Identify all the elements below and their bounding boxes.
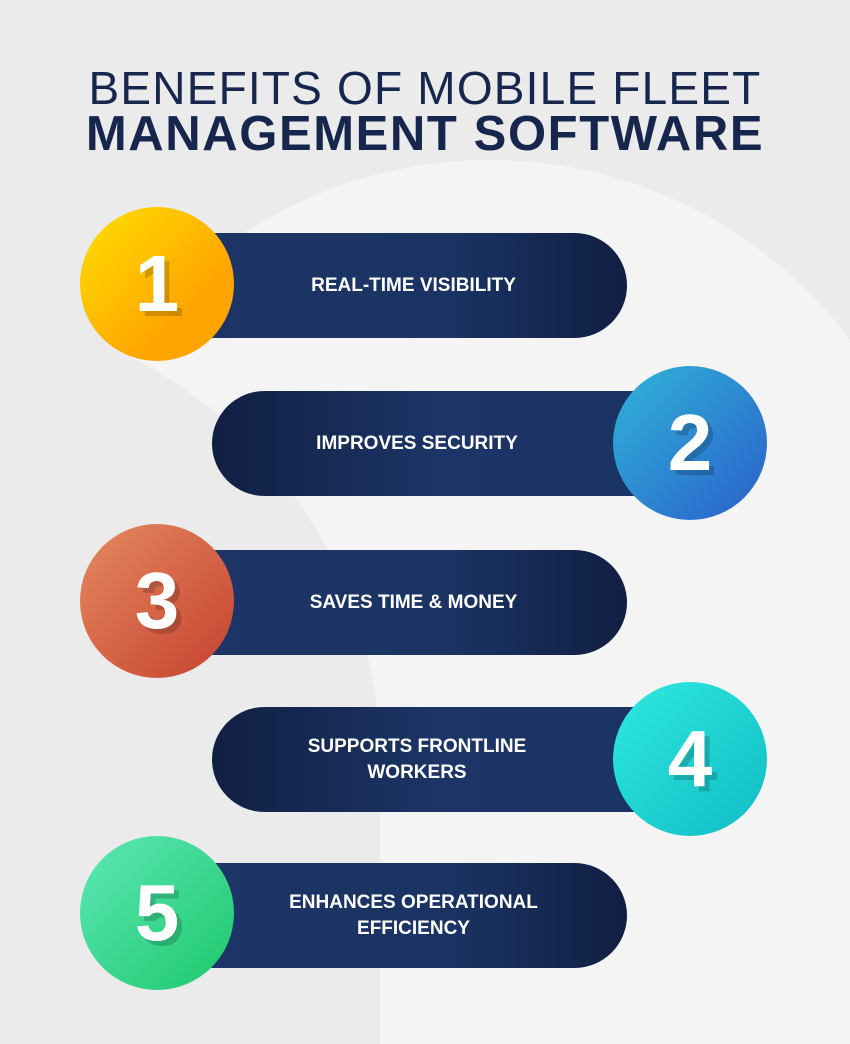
circle 3: 3 — [135, 556, 179, 645]
title: BENEFITS OF MOBILE FLEET — [89, 62, 761, 114]
circle 5 — [80, 836, 234, 990]
title: MANAGEMENT SOFTWARE — [86, 107, 764, 161]
items — [80, 207, 767, 990]
pill: saves time & money: SAVES TIME & MONEY — [310, 592, 517, 612]
pill: improves security: IMPROVES SECURITY — [316, 432, 518, 454]
circle 2: 2 — [668, 398, 712, 487]
circle 4 — [613, 682, 767, 836]
pill: improves security — [212, 391, 662, 496]
pill: supports frontline workers: SUPPORTS FRONTLINE — [308, 736, 526, 756]
circle 2 — [613, 366, 767, 520]
circle 3 — [80, 524, 234, 678]
pill: supports frontline workers — [212, 707, 662, 812]
circle 4: 4 — [668, 714, 712, 803]
pill: supports frontline workers: WORKERS — [367, 762, 467, 782]
pill: enhances operational efficiency: ENHANCES OPERATIONAL — [289, 892, 538, 912]
pill: enhances operational efficiency: EFFICIENCY — [357, 918, 470, 938]
pill: real-time visibility: REAL-TIME VISIBILITY — [311, 274, 516, 296]
title — [89, 72, 761, 150]
circle 5: 5 — [135, 868, 179, 957]
circle 1 — [80, 207, 234, 361]
circle 1: 1 — [135, 239, 179, 328]
pill: saves time & money — [190, 550, 627, 655]
pill: enhances operational efficiency — [190, 863, 627, 968]
pill: real-time visibility — [190, 233, 627, 338]
